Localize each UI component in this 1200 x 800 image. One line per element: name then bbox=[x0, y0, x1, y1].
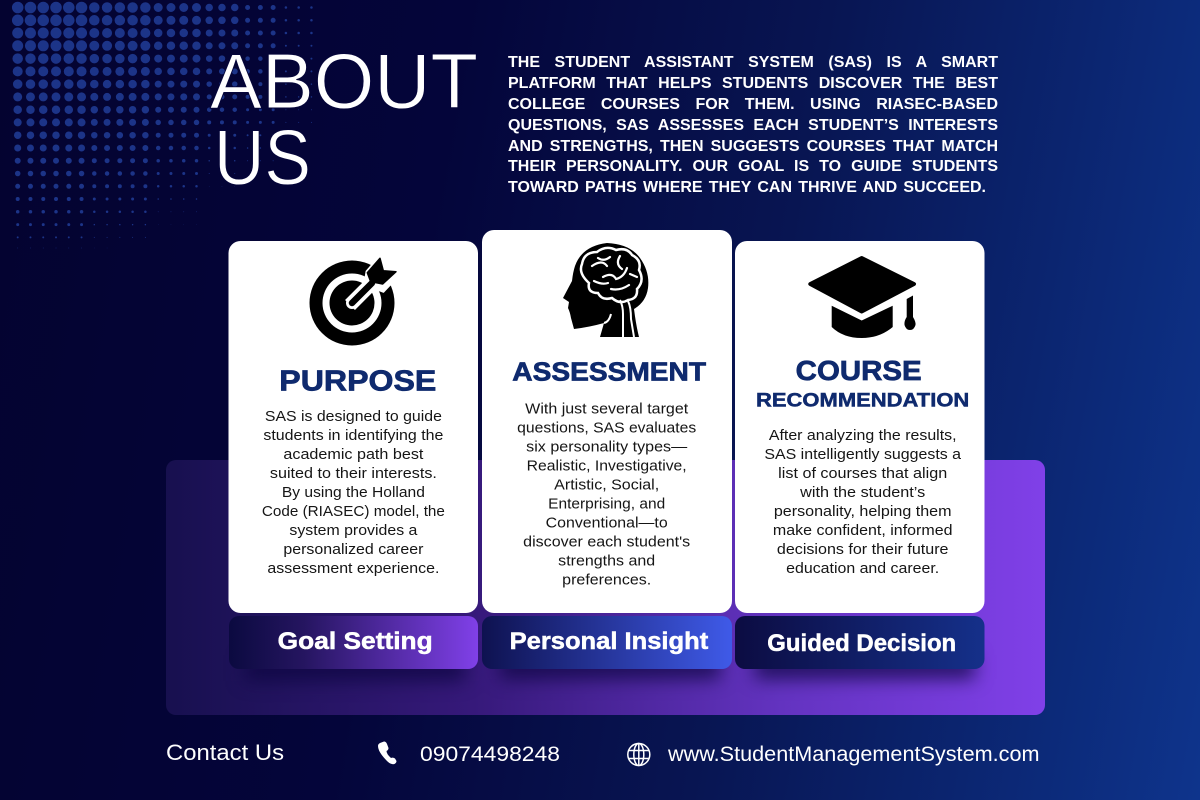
text: course body: make confident, informed bbox=[773, 522, 952, 539]
title: About Us bbox=[210, 37, 478, 201]
text: introduction paragraph: THEIR PERSONALITY. OUR GOAL IS TO GUIDE STUDENTS bbox=[508, 158, 998, 175]
text: introduction paragraph bbox=[508, 54, 998, 196]
text: purpose body: personalized career bbox=[283, 541, 423, 558]
text: introduction paragraph: TOWARD PATHS WHERE THEY CAN THRIVE AND SUCCEED. bbox=[508, 179, 986, 196]
halftone dot pattern bbox=[18, 8, 312, 248]
card: purpose bbox=[228, 241, 478, 613]
text: course body: SAS intelligently suggests a bbox=[764, 446, 962, 463]
text: purpose body: By using the Holland bbox=[282, 484, 425, 501]
icon: target with arrow bbox=[310, 257, 400, 346]
text: purpose body: SAS is designed to guide bbox=[265, 408, 442, 425]
text: course body: decisions for their future bbox=[777, 541, 949, 558]
text: assessment body: Conventional—to bbox=[546, 514, 668, 532]
text: course body: After analyzing the results, bbox=[769, 427, 957, 444]
text: course body: list of courses that align bbox=[778, 465, 947, 482]
text: assessment body: preferences. bbox=[562, 572, 651, 588]
text: assessment body: Artistic, Social, bbox=[554, 476, 659, 494]
text: purpose body: academic path best bbox=[283, 446, 424, 463]
tag: goal setting: Goal Setting bbox=[278, 628, 433, 655]
text: purpose body: students in identifying the bbox=[263, 427, 443, 444]
text: assessment body: six personality types— bbox=[526, 438, 687, 456]
icon: head with brain bbox=[563, 243, 648, 337]
footer: website: www.StudentManagementSystem.com bbox=[667, 743, 1040, 766]
title: About Us: US bbox=[214, 113, 311, 201]
heading: recommendation: RECOMMENDATION bbox=[756, 390, 969, 412]
text: purpose body: suited to their interests. bbox=[270, 465, 437, 482]
footer: contact label: Contact Us bbox=[166, 740, 284, 765]
tag: goal setting bbox=[229, 616, 478, 669]
text: course body bbox=[764, 427, 962, 577]
text: purpose body: Code (RIASEC) model, the bbox=[262, 503, 445, 520]
tag: personal insight bbox=[482, 616, 732, 669]
text: course body: education and career. bbox=[786, 560, 939, 577]
text: purpose body: system provides a bbox=[289, 522, 418, 539]
text: assessment body: discover each student's bbox=[523, 534, 690, 550]
text: assessment body: With just several target bbox=[525, 400, 689, 418]
heading: course: COURSE bbox=[796, 355, 922, 386]
text: course body: personality, helping them bbox=[774, 503, 952, 520]
card: assessment bbox=[482, 230, 732, 613]
text: purpose body: assessment experience. bbox=[267, 560, 439, 577]
text: course body: with the student’s bbox=[799, 484, 925, 501]
purple backing panel bbox=[166, 460, 1045, 715]
icon: globe bbox=[628, 744, 650, 766]
text: assessment body bbox=[517, 400, 696, 588]
footer: phone number: 09074498248 bbox=[420, 743, 560, 766]
heading: assessment: ASSESSMENT bbox=[512, 359, 706, 387]
text: introduction paragraph: QUESTIONS, SAS ASSESSES EACH STUDENT’S INTERESTS bbox=[508, 117, 998, 134]
title: About Us: ABOUT bbox=[210, 37, 478, 125]
text: introduction paragraph: THE STUDENT ASSISTANT SYSTEM (SAS) IS A SMART bbox=[508, 54, 998, 71]
text: introduction paragraph: PLATFORM THAT HELPS STUDENTS DISCOVER THE BEST bbox=[508, 75, 998, 92]
heading: purpose: PURPOSE bbox=[279, 366, 436, 398]
text: introduction paragraph: AND STRENGTHS, THEN SUGGESTS COURSES THAT MATCH bbox=[508, 138, 998, 155]
text: introduction paragraph: COLLEGE COURSES FOR THEM. USING RIASEC-BASED bbox=[508, 96, 998, 113]
card: course recommendation bbox=[735, 241, 984, 613]
tag: guided decision: Guided Decision bbox=[767, 630, 956, 657]
tag: guided decision bbox=[735, 616, 984, 669]
text: assessment body: questions, SAS evaluates bbox=[517, 420, 696, 436]
text: assessment body: strengths and bbox=[558, 552, 655, 570]
text: purpose body bbox=[262, 408, 445, 577]
icon: graduation cap bbox=[810, 258, 916, 338]
text: assessment body: Realistic, Investigative, bbox=[527, 458, 687, 474]
tag shadows bbox=[245, 655, 975, 681]
icon: phone bbox=[378, 742, 396, 764]
tag: personal insight: Personal Insight bbox=[510, 628, 708, 655]
text: assessment body: Enterprising, and bbox=[548, 496, 665, 512]
